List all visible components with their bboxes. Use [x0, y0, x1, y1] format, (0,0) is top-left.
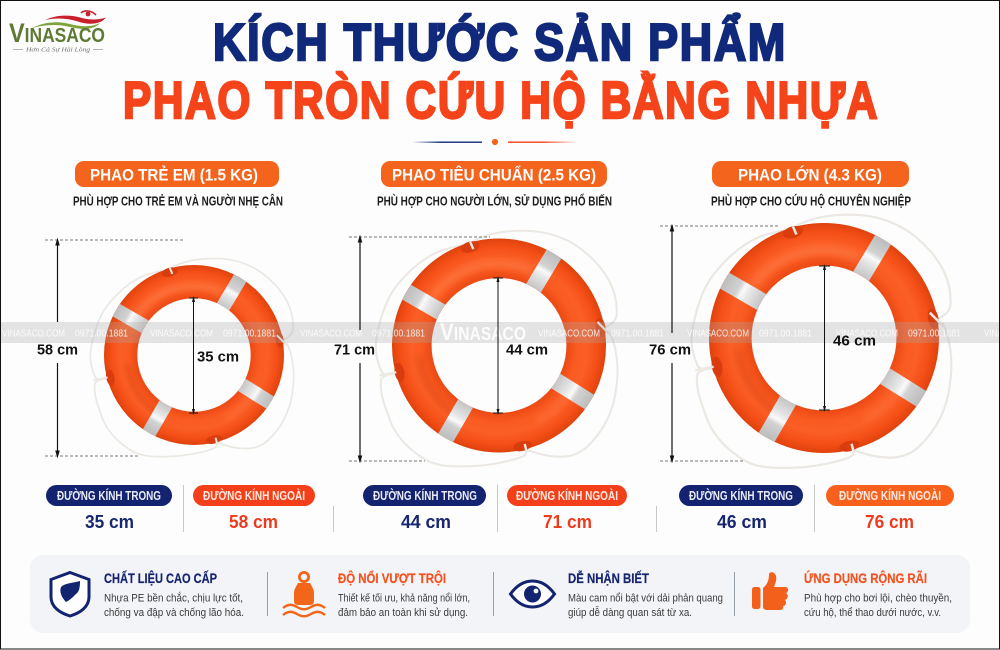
icon: shield	[51, 572, 89, 616]
inner label: 46 cm	[833, 332, 876, 350]
stats: standard buoy	[333, 485, 627, 532]
outer diameter stat	[507, 485, 627, 532]
description: cứu hộ, thể thao dưới nước, v.v.	[804, 607, 941, 619]
logo: Vinasaco	[9, 11, 106, 54]
description: Phù hợp cho bơi lội, chèo thuyền,	[804, 592, 952, 604]
panel: features	[30, 555, 970, 633]
panel: product 2 heading	[377, 161, 612, 208]
stats: child buoy	[46, 485, 315, 532]
description: Thiết kế tối ưu, khả năng nổi lớn,	[338, 592, 470, 604]
inner diameter stat: ĐƯỜNG KÍNH TRONG	[373, 488, 477, 503]
outer label: 76 cm	[649, 342, 691, 358]
description	[568, 592, 723, 619]
inner diameter stat	[46, 485, 172, 532]
description: đảm bảo an toàn khi sử dụng.	[338, 607, 468, 619]
outer diameter stat	[193, 485, 315, 532]
description: Nhựa PE bền chắc, chịu lực tốt,	[104, 592, 243, 604]
inner label: 44 cm	[506, 342, 548, 358]
icon: thumbs up	[752, 572, 788, 610]
inner diameter stat: ĐƯỜNG KÍNH TRONG	[689, 488, 793, 503]
description	[804, 592, 952, 619]
badge: large buoy	[712, 161, 909, 187]
dimensions: child buoy	[37, 240, 239, 456]
stats: large buoy	[656, 485, 954, 532]
watermark band: VINASACO.COM	[300, 328, 362, 340]
watermark band: VINASACO.COM	[150, 328, 213, 340]
watermark band: VINASACO.COM	[538, 328, 600, 340]
heading: CHẤT LIỆU CAO CẤP	[104, 571, 217, 586]
badge: child buoy: PHAO TRẺ EM (1.5 KG)	[90, 165, 258, 184]
logo wordmark: VINASACO	[9, 18, 105, 48]
subtitle: PHÙ HỢP CHO CỨU HỘ CHUYÊN NGHIỆP	[711, 194, 911, 208]
icon: eye	[510, 581, 554, 607]
logo swoosh	[32, 11, 106, 29]
subtitle: PHÙ HỢP CHO TRẺ EM VÀ NGƯỜI NHẸ CÂN	[73, 194, 283, 208]
inner diameter stat	[679, 485, 803, 532]
dimensions: standard buoy	[334, 237, 548, 461]
logo slogan: Hơn Cả Sự Hài Lòng	[25, 46, 91, 54]
description: giúp dễ dàng quan sát từ xa.	[568, 606, 692, 619]
watermark band: VINASACO.COM	[687, 328, 749, 340]
outer diameter arrow	[359, 238, 361, 460]
watermark band: 0971.00.1881	[611, 328, 664, 340]
feature: material	[51, 571, 244, 619]
description	[104, 592, 244, 619]
panel: product 1 heading	[73, 161, 283, 208]
description	[338, 592, 470, 619]
outer diameter arrow	[671, 227, 673, 460]
icon: buoy on water	[283, 572, 325, 616]
feature: buoyancy	[283, 571, 470, 619]
outer label: 71 cm	[334, 342, 375, 358]
heading: DỄ NHẬN BIẾT	[568, 571, 650, 586]
inner label: 35 cm	[197, 348, 239, 366]
inner diameter arrow	[493, 278, 503, 413]
life ring: standard	[376, 231, 617, 466]
watermark band: 0971.00.1881	[372, 328, 425, 340]
badge: large buoy: PHAO LỚN (4.3 KG)	[738, 165, 882, 184]
inner diameter stat	[363, 485, 486, 532]
panel: product 3 heading	[711, 161, 911, 208]
watermark band: 0971.00.1881	[759, 328, 812, 340]
inner diameter stat: 46 cm	[717, 511, 767, 532]
heading: ĐỘ NỔI VƯỢT TRỘI	[338, 571, 446, 586]
watermark band	[0, 319, 1000, 346]
dimensions: large buoy	[649, 226, 876, 461]
outer diameter stat: 71 cm	[543, 511, 592, 532]
inner diameter arrow	[189, 298, 198, 413]
outer diameter stat: ĐƯỜNG KÍNH NGOÀI	[516, 488, 618, 503]
inner diameter arrow	[819, 266, 830, 410]
inner diameter stat: 44 cm	[401, 511, 451, 532]
watermark band: VINASACO.COM	[836, 328, 898, 340]
subtitle: PHÙ HỢP CHO NGƯỜI LỚN, SỬ DỤNG PHỔ BIẾN	[377, 194, 612, 208]
outer diameter stat: 76 cm	[865, 511, 914, 532]
outer diameter stat	[826, 485, 954, 532]
inner diameter stat: 35 cm	[85, 511, 134, 532]
badge: child buoy	[75, 161, 279, 187]
life ring: child	[90, 258, 294, 457]
watermark band: 0971.00.1881	[223, 328, 276, 340]
inner diameter stat: ĐƯỜNG KÍNH TRONG	[57, 488, 161, 503]
watermark band: VINASACO.COM	[2, 328, 65, 340]
title divider	[412, 139, 578, 145]
outer diameter arrow	[56, 241, 58, 455]
badge: standard buoy	[381, 161, 607, 187]
outer diameter stat: ĐƯỜNG KÍNH NGOÀI	[839, 488, 941, 503]
description: Màu cam nổi bật với dải phản quang	[568, 592, 723, 604]
feature: visibility	[510, 571, 723, 619]
watermark band: 0971.00.1881	[908, 328, 961, 340]
description: chống va đập và chống lão hóa.	[104, 607, 244, 619]
feature: applications	[752, 571, 952, 619]
outer diameter stat: ĐƯỜNG KÍNH NGOÀI	[203, 488, 305, 503]
title	[123, 13, 879, 130]
title line 1: KÍCH THƯỚC SẢN PHẨM	[213, 13, 787, 72]
life ring: large	[692, 215, 951, 468]
outer diameter stat: 58 cm	[229, 511, 278, 532]
outer label: 58 cm	[37, 342, 78, 358]
heading: ỨNG DỤNG RỘNG RÃI	[804, 571, 927, 586]
badge: standard buoy: PHAO TIÊU CHUẨN (2.5 KG)	[392, 165, 596, 184]
watermark band: VINASACO	[440, 319, 526, 346]
watermark band: 0971.00.1881	[75, 328, 128, 340]
